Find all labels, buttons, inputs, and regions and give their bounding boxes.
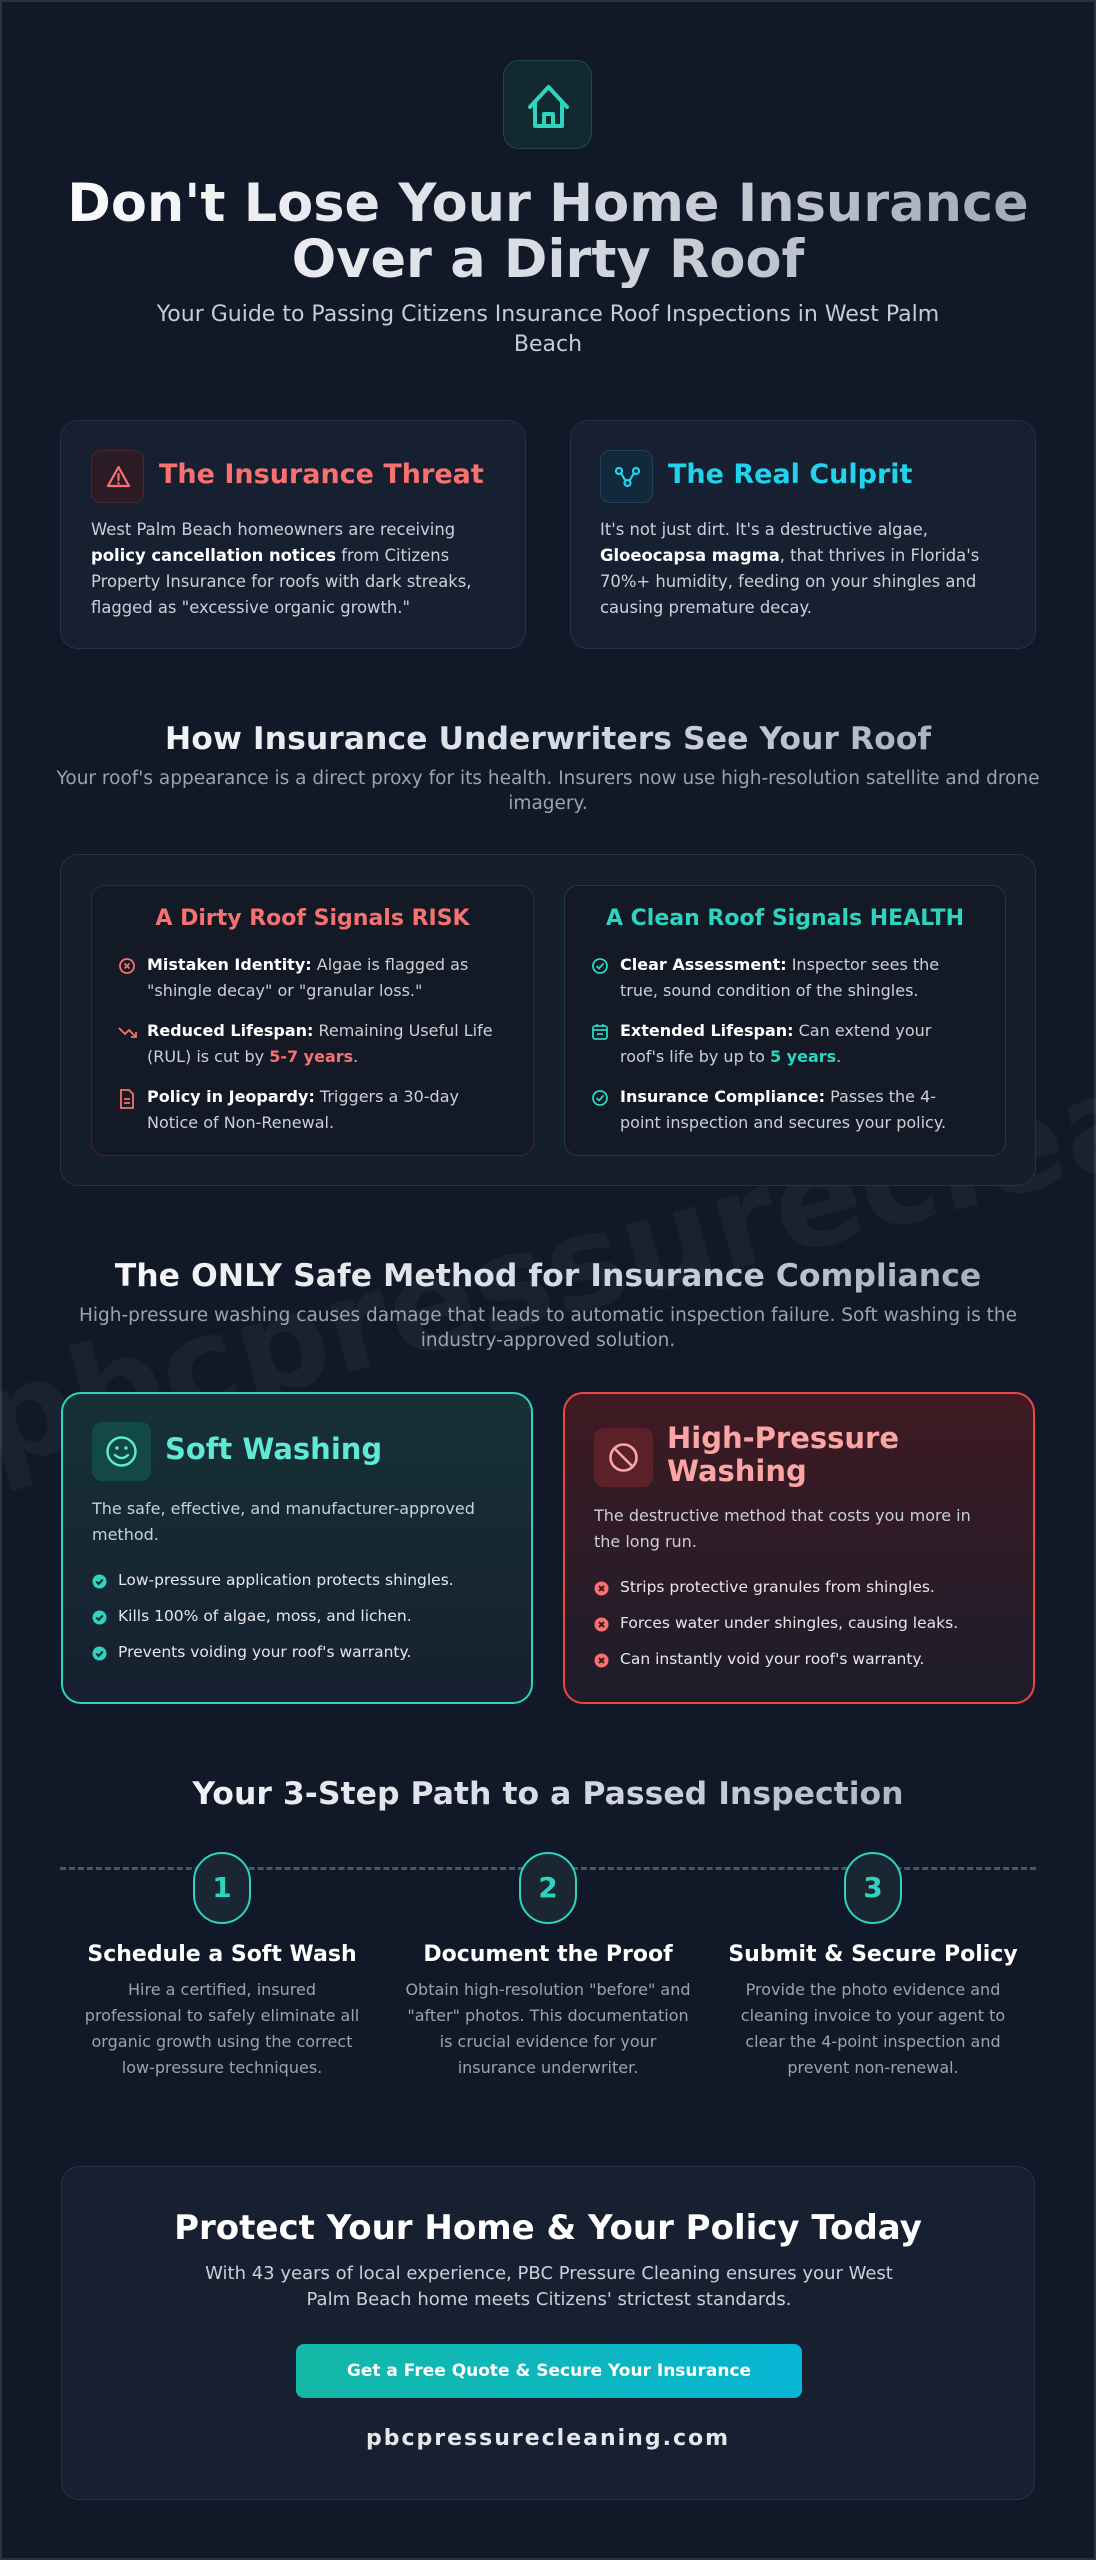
heading: The Insurance Threat [159, 459, 484, 490]
icon: smile [92, 1422, 151, 1481]
step 1 [85, 1852, 359, 2077]
panel: soft washing [61, 1392, 533, 1704]
icon: ban [594, 1428, 653, 1487]
panel: comparison [60, 854, 1036, 1186]
heading: underwriters: How Insurance Underwriters See Your Roof [165, 721, 931, 757]
step 2: Obtain high-resolution "before" and "after" photos. This documentation is crucial evidence for your insurance underwriter. [405, 1980, 691, 2077]
list: benefits [592, 955, 946, 1132]
list: soft benefits [92, 1571, 454, 1661]
panel: clean roof [564, 885, 1006, 1156]
panel: dirty roof: Policy in Jeopardy: Triggers a 30-day Notice of Non-Renewal. [147, 1087, 459, 1132]
list: soft benefits: Prevents voiding your roof's warranty. [118, 1643, 411, 1661]
heading: 3-step path: Your 3-Step Path to a Passed Inspection [192, 1776, 904, 1812]
heading: A Dirty Roof Signals RISK [155, 906, 470, 931]
panel: call to action [61, 2166, 1035, 2500]
text: It's not just dirt. It's a destructive algae, Gloeocapsa magma, that thrives in Florida's 70%+ humidity, feeding on your shingles and causing premature decay. [600, 520, 979, 617]
title [0, 176, 1096, 288]
step 1: Hire a certified, insured professional to safely eliminate all organic growth using the correct low-pressure techniques. [85, 1980, 359, 2077]
step 1: Schedule a Soft Wash [87, 1942, 357, 1967]
step 2: 2 [538, 1871, 558, 1904]
list: risks [118, 955, 493, 1132]
url: pbcpressurecleaning.com [366, 2426, 730, 2451]
panel: high-pressure washing [563, 1392, 1035, 1704]
step 2 [405, 1852, 691, 2077]
text: The destructive method that costs you more in the long run. [594, 1506, 971, 1551]
panel: dirty roof [91, 885, 534, 1156]
list: soft benefits: Kills 100% of algae, moss, and lichen. [118, 1607, 412, 1625]
panel: dirty roof: Mistaken Identity: Algae is flagged as "shingle decay" or "granular loss." [147, 955, 468, 1000]
list: high-pressure harms: Can instantly void your roof's warranty. [620, 1650, 924, 1668]
text: underwriters subtitle: Your roof's appearance is a direct proxy for its health. Insurers now use high-resolution satellite and drone imagery. [57, 768, 1039, 814]
step 3 [728, 1852, 1018, 2077]
icon: warning [91, 450, 144, 503]
list: soft benefits: Low-pressure application protects shingles. [118, 1571, 454, 1589]
heading: 3-step path [0, 1776, 1096, 1812]
panel: dirty roof: Reduced Lifespan: Remaining Useful Life (RUL) is cut by 5-7 years. [147, 1021, 493, 1066]
text: method subtitle: High-pressure washing causes damage that leads to automatic inspection failure. Soft washing is the industry-approved solution. [79, 1305, 1017, 1351]
heading [667, 1421, 899, 1488]
heading: only safe method: The ONLY Safe Method for Insurance Compliance [115, 1258, 981, 1294]
heading: The Real Culprit [668, 459, 912, 490]
heading: High-Pressure [667, 1421, 899, 1455]
text: With 43 years of local experience, PBC Pressure Cleaning ensures your West Palm Beach home meets Citizens' strictest standards. [205, 2263, 893, 2310]
button [296, 2344, 802, 2398]
text: The safe, effective, and manufacturer-approved method. [92, 1499, 475, 1544]
heading: Soft Washing [165, 1432, 382, 1466]
panel: clean roof: Extended Lifespan: Can extend your roof's life by up to 5 years. [620, 1021, 931, 1066]
heading: underwriters [0, 721, 1096, 757]
step 3: 3 [863, 1871, 883, 1904]
button: Get a Free Quote & Secure Your Insurance [347, 2361, 751, 2381]
heading: Washing [667, 1454, 807, 1488]
text: West Palm Beach homeowners are receiving policy cancellation notices from Citizens Property Insurance for roofs with dark streaks, flagged as "excessive organic growth." [91, 520, 471, 617]
title: Don't Lose Your Home Insurance [67, 173, 1029, 234]
list: high-pressure harms: Forces water under shingles, causing leaks. [620, 1614, 958, 1632]
step 3: Provide the photo evidence and cleaning invoice to your agent to clear the 4-point inspection and prevent non-renewal. [741, 1980, 1005, 2077]
icon: house [503, 60, 592, 149]
step 2: Document the Proof [423, 1942, 673, 1967]
list: high-pressure harms: Strips protective granules from shingles. [620, 1578, 935, 1596]
panel: clean roof: Insurance Compliance: Passes the 4-point inspection and secures your policy. [620, 1087, 946, 1132]
panel: insurance threat [60, 420, 526, 649]
list: high-pressure harms [594, 1578, 958, 1668]
title: Over a Dirty Roof [292, 229, 804, 290]
timeline [60, 1852, 1036, 2077]
icon: nodes [600, 450, 653, 503]
panel: real culprit [570, 420, 1036, 649]
step 1: 1 [212, 1871, 232, 1904]
step 3: Submit & Secure Policy [728, 1942, 1018, 1967]
heading: A Clean Roof Signals HEALTH [606, 906, 964, 931]
panel: clean roof: Clear Assessment: Inspector sees the true, sound condition of the shingles. [620, 955, 939, 1000]
subtitle: Your Guide to Passing Citizens Insurance Roof Inspections in West Palm Beach [157, 302, 939, 357]
heading: Protect Your Home & Your Policy Today [174, 2208, 922, 2248]
